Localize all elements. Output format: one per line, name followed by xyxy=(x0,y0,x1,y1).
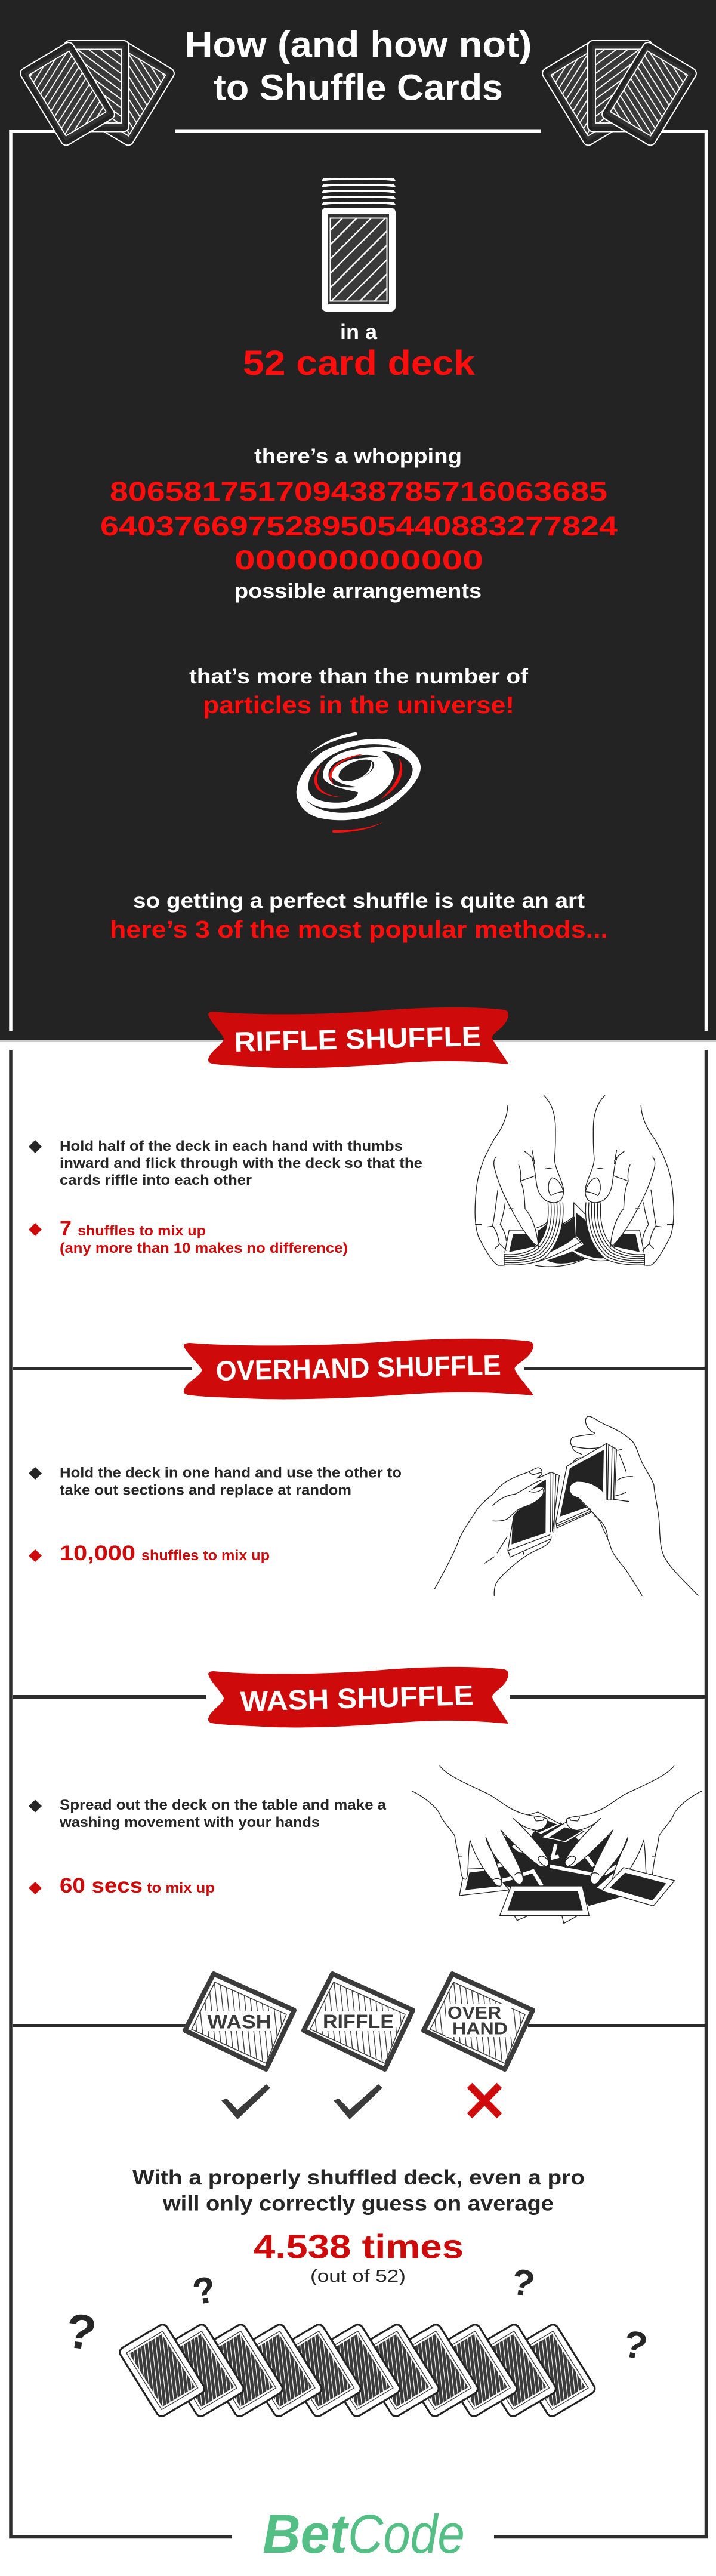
bullet: wash instructions xyxy=(29,1797,387,1831)
text: more than number of: that’s more than the number of xyxy=(189,665,528,688)
bullet: wash instructions: Spread out the deck on the table and make a xyxy=(60,1797,387,1813)
text: permutations number: 806581751709438785716063685 xyxy=(110,476,607,507)
card: overhand: OVER xyxy=(448,2004,501,2023)
text: there's a whopping: there’s a whopping xyxy=(254,445,462,468)
bullet: overhand instructions: Hold the deck in one hand and use the other to xyxy=(60,1465,402,1481)
bullet: overhand stat xyxy=(29,1542,270,1565)
icon: overhand cross xyxy=(470,2085,499,2116)
card: overhand xyxy=(424,1974,533,2069)
banner: riffle shuffle xyxy=(208,1007,508,1068)
text: permutations number xyxy=(100,476,618,575)
bullet: riffle instructions xyxy=(29,1138,422,1188)
text: 4.538 times: 4.538 times xyxy=(254,2227,464,2266)
bullet: riffle instructions: Hold half of the deck in each hand with thumbs xyxy=(60,1138,403,1154)
text: possible arrangements: possible arrangements xyxy=(234,580,482,603)
text: pro guess: With a properly shuffled deck, even a pro xyxy=(132,2166,585,2189)
logo: BetCode xyxy=(263,2504,465,2565)
bullet: riffle stat: 7 xyxy=(60,1217,72,1240)
text: in a: in a xyxy=(340,321,378,344)
white frame around intro xyxy=(11,131,706,1031)
bullet: riffle stat: (any more than 10 makes no difference) xyxy=(60,1240,348,1256)
icon: wash check xyxy=(221,2084,270,2119)
divider: verdict left xyxy=(13,2024,186,2027)
icon: question mark far left: ? xyxy=(63,2303,100,2361)
title: to Shuffle Cards xyxy=(214,67,503,107)
illustration: wash hands xyxy=(412,1765,702,1924)
icon: fanned cards right xyxy=(541,41,698,147)
bullet: riffle stat xyxy=(29,1217,348,1256)
text: out of 52: (out of 52) xyxy=(310,2267,406,2286)
bullet: overhand instructions xyxy=(29,1465,402,1498)
bullet: wash stat: to mix up xyxy=(147,1880,215,1896)
text: perfect shuffle: so getting a perfect shuffle is quite an art xyxy=(133,889,585,913)
banner: riffle shuffle: RIFFLE SHUFFLE xyxy=(234,1020,482,1058)
icon: question mark upper right: ? xyxy=(508,2261,538,2306)
banner: wash shuffle xyxy=(208,1667,508,1727)
title underline xyxy=(175,129,541,133)
title: How (and how not) xyxy=(185,24,532,64)
divider: wash left xyxy=(13,1695,206,1699)
bullet: overhand stat: shuffles to mix up xyxy=(141,1548,270,1564)
bullet: wash stat: 60 secs xyxy=(60,1874,143,1897)
divider: wash right xyxy=(510,1695,705,1699)
bullet: riffle instructions: cards riffle into each other xyxy=(60,1172,252,1188)
card: riffle: RIFFLE xyxy=(323,2011,394,2032)
panel: white methods background xyxy=(0,1040,716,2576)
divider: overhand left xyxy=(13,1367,192,1370)
text: pro guess xyxy=(132,2166,585,2216)
text: 52 card deck: 52 card deck xyxy=(243,344,476,383)
card: wash: WASH xyxy=(208,2011,271,2033)
row of eleven cards xyxy=(118,2323,597,2418)
bullet: riffle stat: shuffles to mix up xyxy=(78,1223,206,1239)
icon: spiral galaxy xyxy=(297,732,421,833)
logo: BetCode: Bet xyxy=(263,2504,349,2565)
card: wash xyxy=(185,1974,294,2069)
icon: fanned cards left xyxy=(18,41,176,147)
icon: deck of cards xyxy=(322,178,396,312)
bullet: overhand stat: 10,000 xyxy=(60,1542,135,1565)
illustration: overhand hands xyxy=(434,1416,698,1595)
divider line at panel edge xyxy=(0,1040,716,1042)
text: particles in the universe: particles in the universe! xyxy=(203,691,514,719)
icon: question mark far right: ? xyxy=(619,2322,651,2368)
banner: overhand shuffle xyxy=(184,1339,533,1399)
bullet: overhand instructions: take out sections and replace at random xyxy=(60,1483,351,1498)
bullet: wash stat xyxy=(29,1874,215,1897)
bullet: wash instructions: washing movement with your hands xyxy=(59,1814,320,1831)
logo: BetCode: Code xyxy=(348,2504,465,2565)
card: riffle xyxy=(304,1974,413,2069)
card: overhand: HAND xyxy=(452,2020,508,2039)
divider: verdict right xyxy=(528,2024,705,2027)
text: permutations number: 000000000000 xyxy=(234,545,483,575)
icon: riffle check xyxy=(334,2084,382,2119)
divider: overhand right xyxy=(524,1367,705,1370)
bullet: riffle instructions: inward and flick through with the deck so that the xyxy=(60,1155,422,1172)
panel: dark intro background xyxy=(0,0,716,1040)
text: pro guess: will only correctly guess on average xyxy=(162,2192,554,2216)
dark frame around methods xyxy=(11,1050,706,2537)
title xyxy=(185,24,532,107)
illustration: riffle hands xyxy=(475,1096,674,1267)
banner: overhand shuffle: OVERHAND SHUFFLE xyxy=(215,1349,501,1386)
banner: wash shuffle: WASH SHUFFLE xyxy=(240,1679,474,1717)
text: three popular methods: here’s 3 of the most popular methods... xyxy=(110,916,608,943)
text: permutations number: 6403766975289505440883277824 xyxy=(100,511,618,541)
icon: question mark upper left: ? xyxy=(189,2269,220,2313)
